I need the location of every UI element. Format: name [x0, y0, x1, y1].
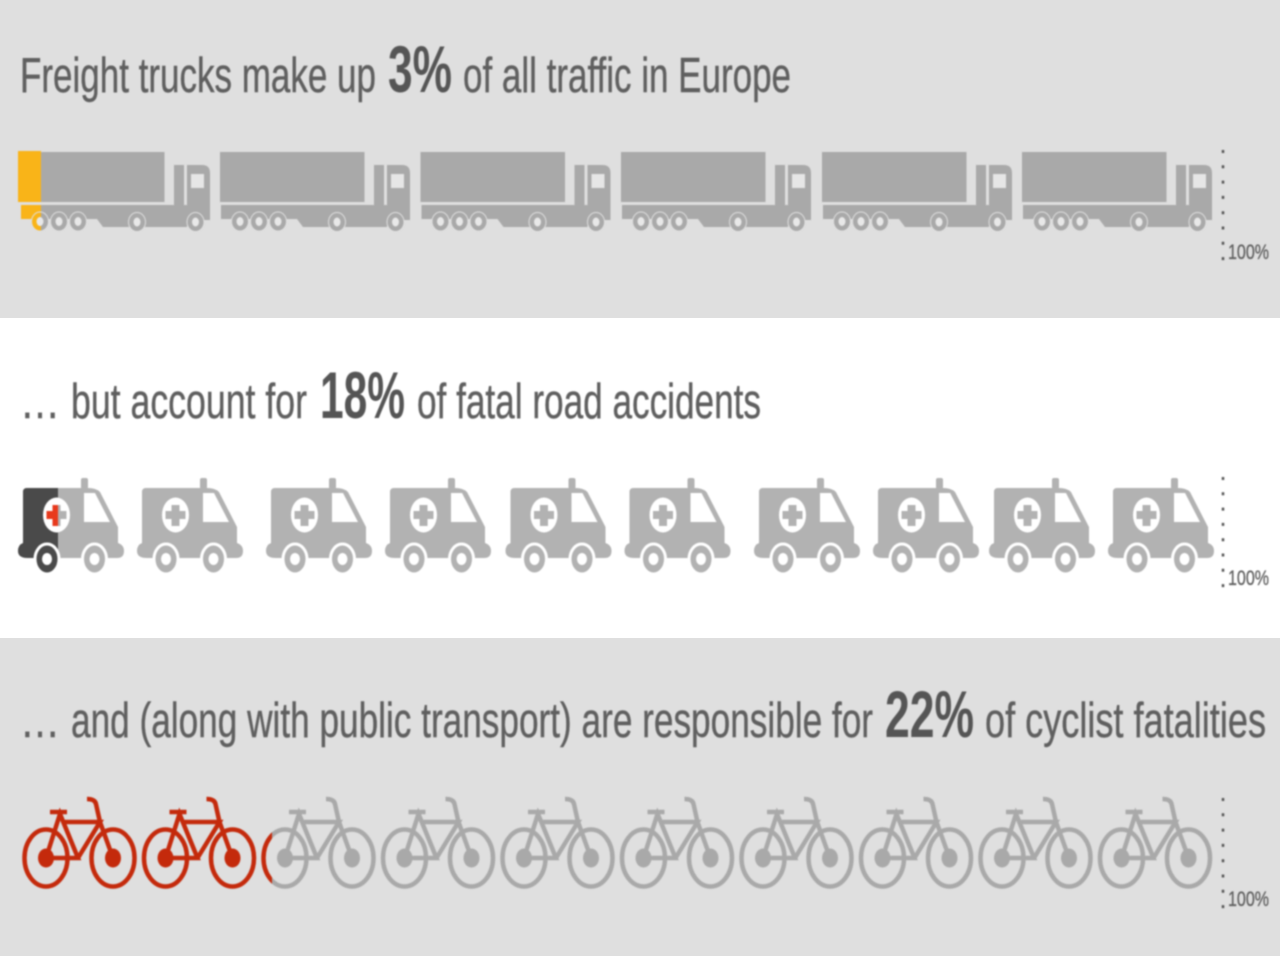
- heading: 18% of fatal accidents: …: [20, 375, 60, 429]
- heading: 22% of cyclist fatalities: [20, 677, 1266, 751]
- icon row: ten ambulances: [18, 478, 1214, 574]
- heading: 18% of fatal accidents: [20, 358, 761, 432]
- heading: 22% of cyclist fatalities: …: [20, 694, 60, 748]
- heading: 18% of fatal accidents: of fatal road accidents: [417, 375, 761, 429]
- 100% scale marker: [1223, 798, 1269, 911]
- highlighted 3% portion of first truck: [17, 150, 42, 232]
- panel: share of cyclist fatalities: [0, 638, 1280, 956]
- heading: trucks 3% of traffic: 3%: [388, 32, 452, 106]
- 100% scale marker: [1223, 477, 1269, 590]
- panel: freight share of traffic: [0, 0, 1280, 318]
- highlighted 18% portion of first ambulance: [17, 487, 59, 574]
- icon row: ten bicycles: [24, 799, 1210, 886]
- heading: 18% of fatal accidents: 18%: [320, 358, 405, 432]
- heading: 22% of cyclist fatalities: 22%: [885, 677, 974, 751]
- heading: trucks 3% of traffic: Freight trucks make up: [20, 49, 376, 103]
- panel: share of fatal accidents: [17, 370, 1270, 588]
- heading: trucks 3% of traffic: [20, 32, 791, 106]
- heading: 22% of cyclist fatalities: and (along with public transport) are responsible for: [71, 694, 873, 748]
- 100% scale marker: [1223, 150, 1269, 264]
- heading: 18% of fatal accidents: but account for: [71, 375, 307, 429]
- icon row: six trucks: [18, 151, 1212, 232]
- highlighted 22% of bicycles: [21, 796, 273, 890]
- heading: trucks 3% of traffic: of all traffic in Europe: [463, 49, 791, 103]
